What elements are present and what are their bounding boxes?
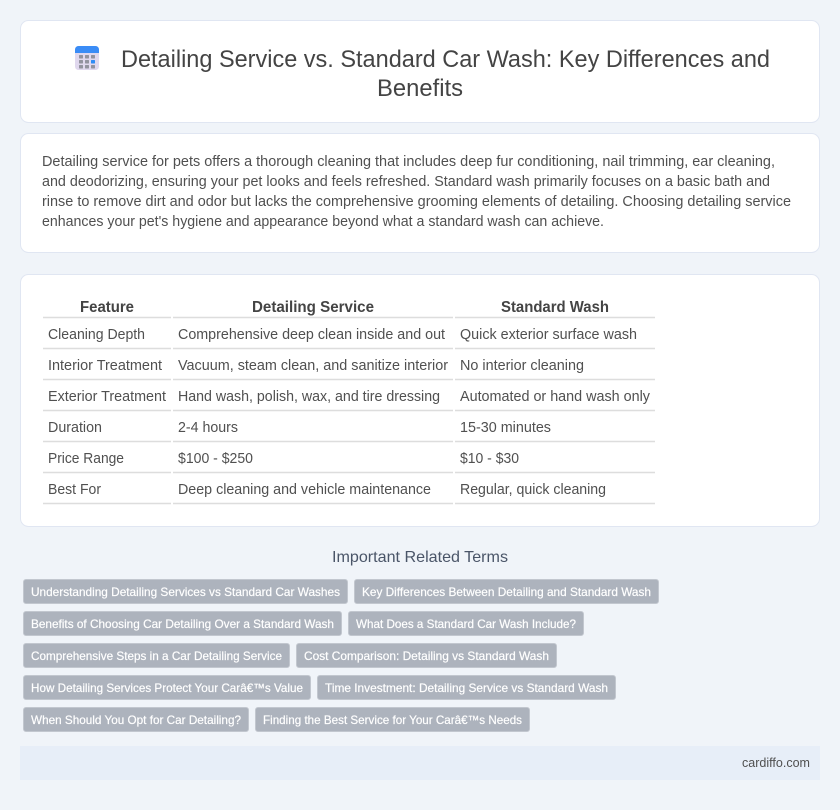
tag [24, 676, 310, 700]
table row: cleaning depth: Comprehensive deep clean inside and out [178, 327, 445, 343]
tag [348, 612, 584, 636]
table row: duration: 2-4 hours [178, 420, 238, 436]
tag: Benefits of Choosing Car Detailing Over a Standard Wash [31, 617, 334, 631]
tag [24, 580, 348, 604]
table row: price range: Price Range [48, 451, 124, 467]
text block: introduction [42, 154, 791, 230]
tag [24, 708, 248, 732]
table header: Detailing Service [252, 299, 374, 316]
title [121, 46, 770, 102]
table row: best for: Deep cleaning and vehicle maintenance [178, 482, 431, 498]
table row: exterior treatment: Exterior Treatment [48, 389, 166, 405]
text block: introduction: and deodorizing, ensuring your pet looks and feels refreshed. Standard wash primarily focuses on a basic bath and [42, 174, 770, 190]
tag [256, 708, 530, 732]
table row: duration [43, 420, 655, 442]
tag [24, 644, 290, 668]
text block: introduction: rinse to remove dirt and odor but lacks the comprehensive grooming elements of detailing. Choosing detailing service [42, 194, 791, 210]
table row: best for: Regular, quick cleaning [460, 482, 606, 498]
table row: exterior treatment: Hand wash, polish, wax, and tire dressing [178, 389, 440, 405]
table row: duration: 15-30 minutes [460, 420, 551, 436]
text block: introduction: Detailing service for pets offers a thorough cleaning that includes deep fur conditioning, nail trimming, ear cleaning, [42, 154, 775, 170]
panel: comparison table [20, 274, 820, 526]
text block: introduction: enhances your pet's hygiene and appearance beyond what a standard wash can achieve. [42, 214, 604, 230]
footer [20, 746, 820, 780]
tag: Finding the Best Service for Your Carâ€™s Needs [263, 713, 522, 727]
table row: price range: $10 - $30 [460, 451, 519, 467]
table row: best for: Best For [48, 482, 101, 498]
table row: cleaning depth: Cleaning Depth [48, 327, 145, 343]
table row: price range [43, 451, 655, 472]
table row: interior treatment: Vacuum, steam clean, and sanitize interior [178, 358, 448, 374]
tag: Comprehensive Steps in a Car Detailing Service [31, 649, 282, 663]
table row: duration: Duration [48, 420, 102, 436]
tag: How Detailing Services Protect Your Carâ€™s Value [31, 681, 303, 695]
heading: related terms: Important Related Terms [332, 549, 508, 566]
tag [24, 612, 342, 636]
table row: best for [43, 482, 655, 504]
table header: Feature [80, 299, 134, 316]
table row: exterior treatment [43, 389, 655, 410]
table row: cleaning depth [43, 327, 655, 348]
icon: calendar [75, 46, 99, 70]
tag: When Should You Opt for Car Detailing? [31, 713, 241, 727]
table row: exterior treatment: Automated or hand wash only [460, 389, 651, 405]
title: Detailing Service vs. Standard Car Wash: Key Differences and [121, 46, 770, 73]
tag [318, 676, 616, 700]
tag: Key Differences Between Detailing and Standard Wash [362, 585, 651, 599]
table header: Standard Wash [501, 299, 609, 316]
table row: interior treatment: Interior Treatment [48, 358, 162, 374]
title: Benefits [377, 75, 463, 102]
tag [354, 580, 658, 604]
table row: price range: $100 - $250 [178, 451, 253, 467]
panel: header [20, 20, 820, 122]
table row: interior treatment [43, 358, 655, 380]
table header [43, 299, 655, 318]
related terms tags [24, 580, 658, 732]
table row: interior treatment: No interior cleaning [460, 358, 584, 374]
footer: cardiffo.com [742, 756, 810, 770]
tag: Understanding Detailing Services vs Standard Car Washes [31, 585, 340, 599]
tag: What Does a Standard Car Wash Include? [356, 617, 576, 631]
tag: Time Investment: Detailing Service vs Standard Wash [325, 681, 608, 695]
tag: Cost Comparison: Detailing vs Standard Wash [304, 649, 549, 663]
table row: cleaning depth: Quick exterior surface wash [460, 327, 637, 343]
panel: introduction [20, 134, 820, 252]
tag [296, 644, 556, 668]
